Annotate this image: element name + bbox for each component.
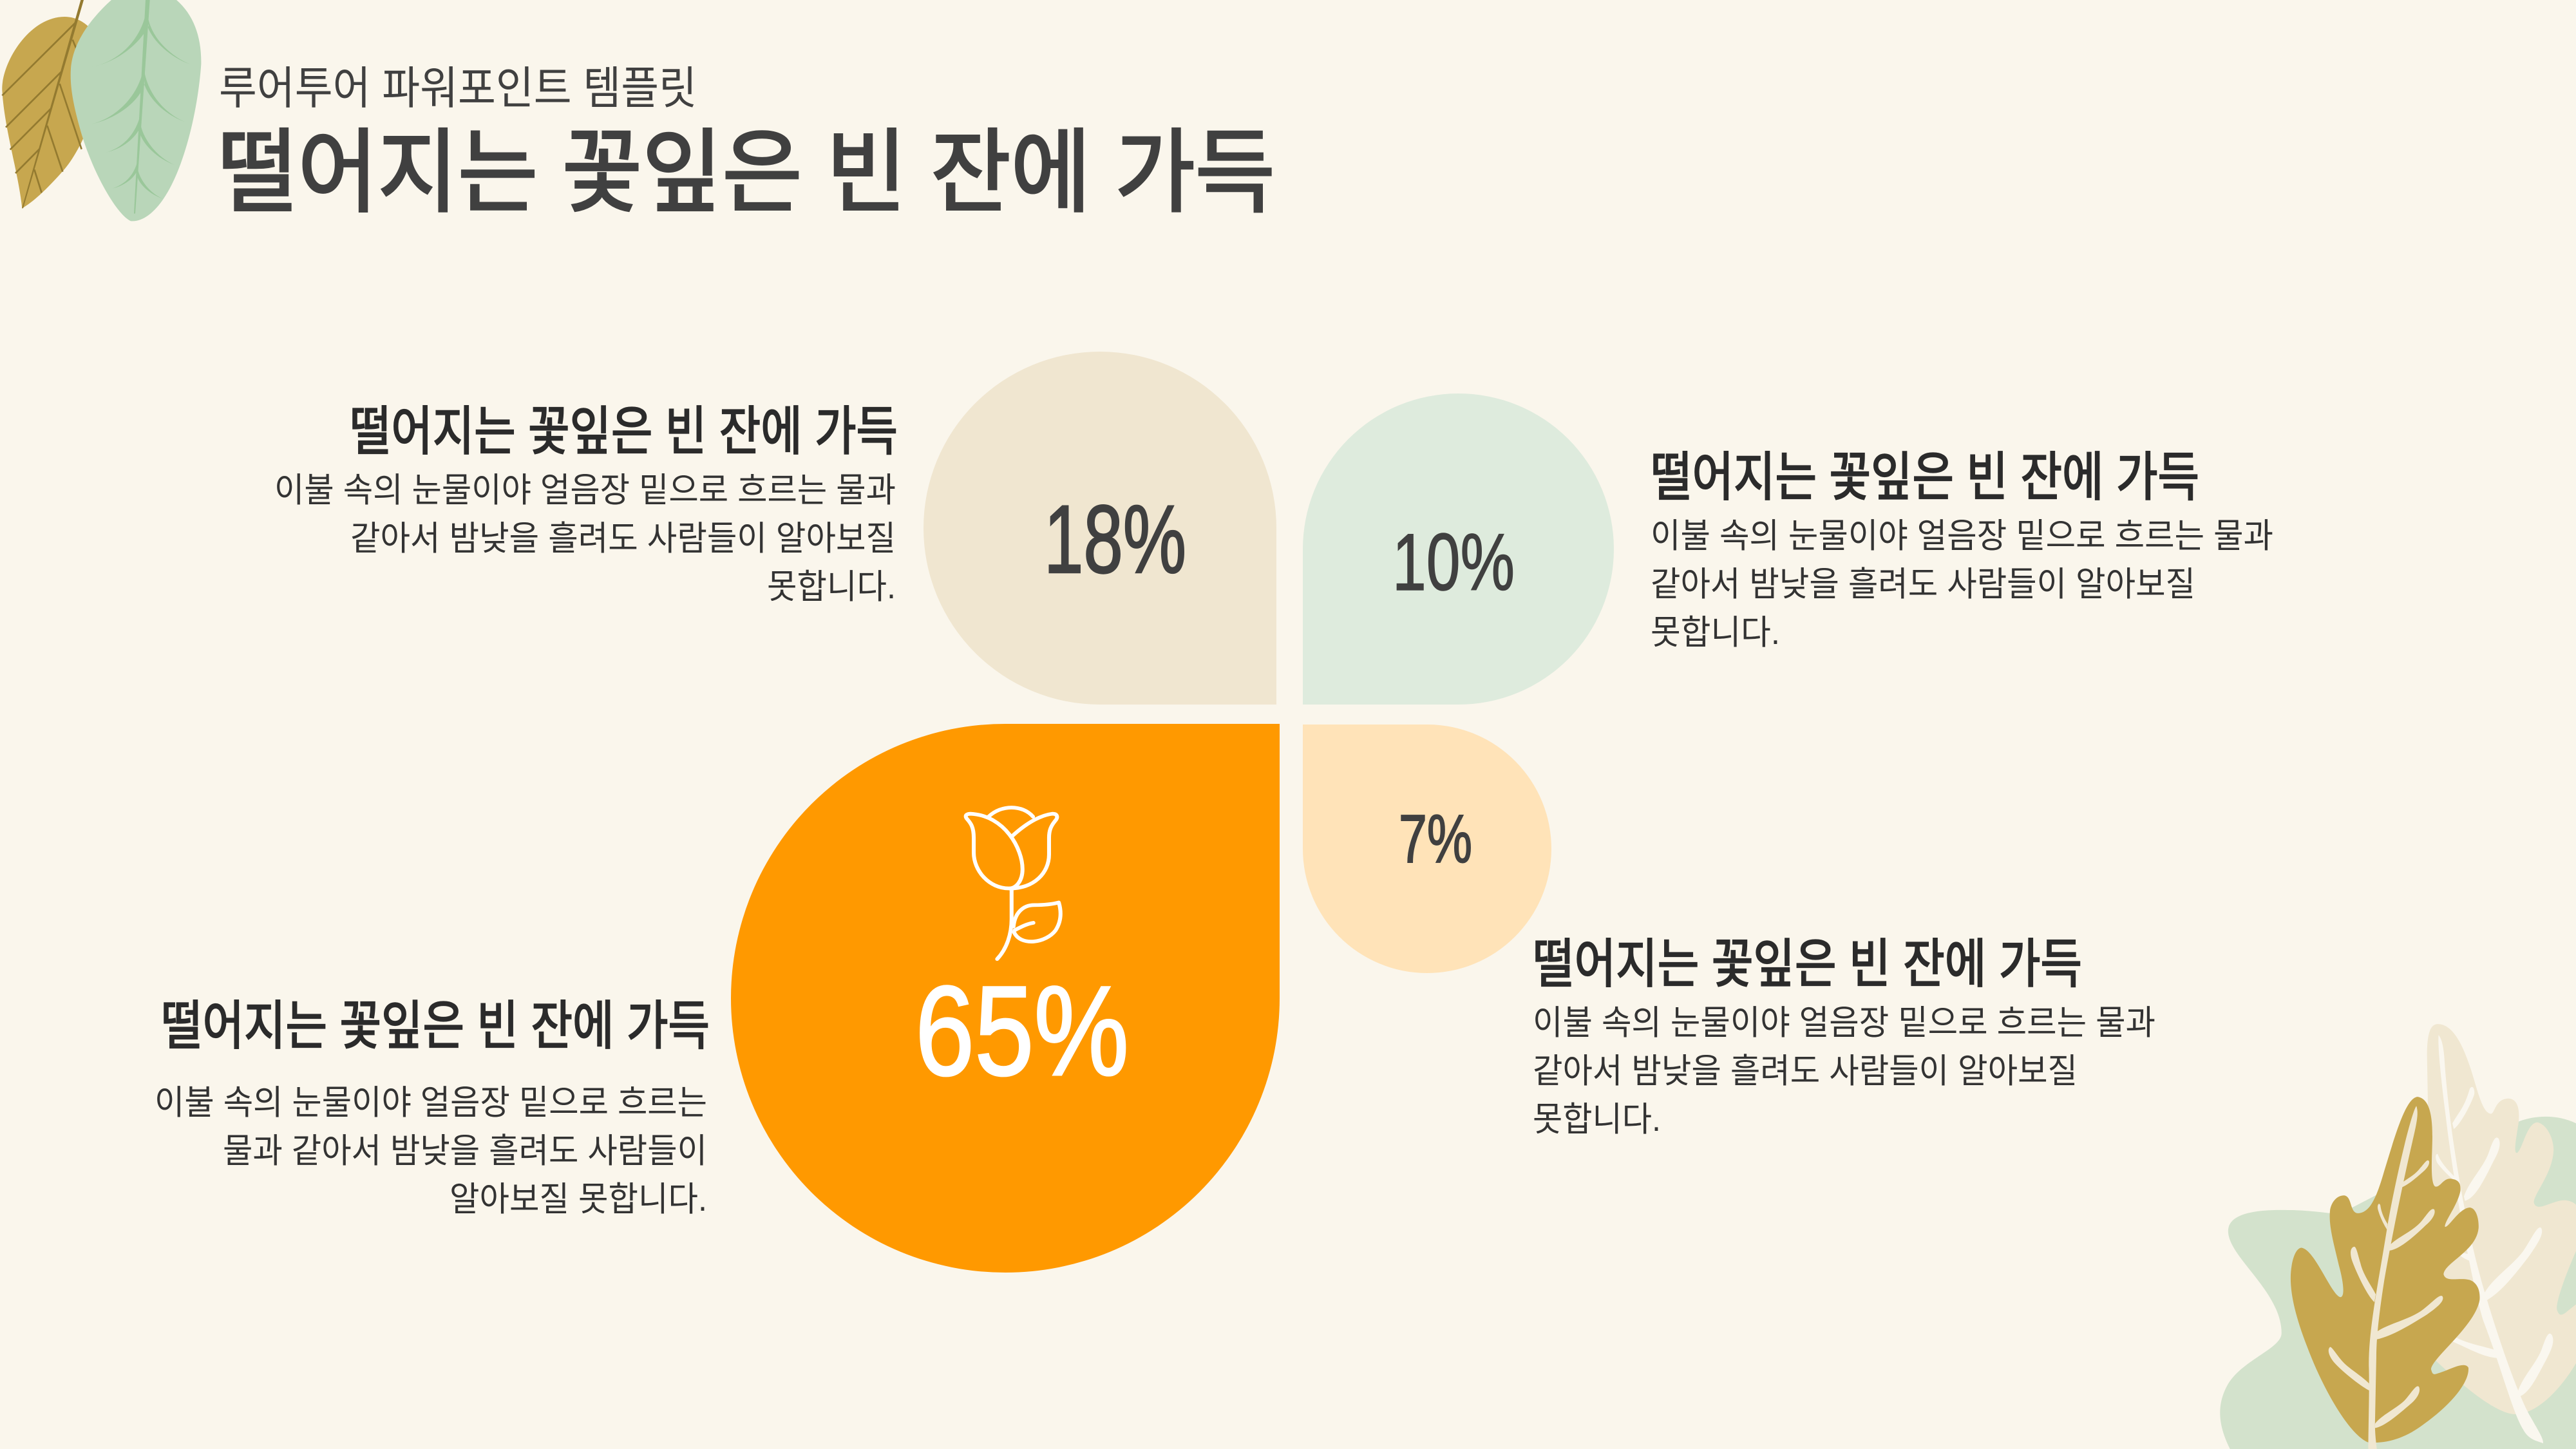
panel: 7% petal [1303, 724, 1551, 973]
body: 못합니다. [1533, 1101, 1661, 1139]
icon: cream leaf [2427, 1024, 2576, 1443]
icon: gold leaf [2291, 1097, 2480, 1449]
icon: green leaf [71, 0, 201, 221]
main title: 떨어지는 꽃잎은 빈 잔에 가득 [218, 122, 1275, 224]
body: 못합니다. [1651, 614, 1780, 652]
body [1651, 517, 2273, 652]
heading: 떨어지는 꽃잎은 빈 잔에 가득 [1533, 935, 2082, 994]
body: 알아보질 못합니다. [450, 1180, 707, 1218]
text block: 10% [1651, 448, 2273, 652]
body: 물과 같아서 밤낮을 흘려도 사람들이 [223, 1132, 707, 1170]
body: 같아서 밤낮을 흘려도 사람들이 알아보질 [1533, 1052, 2078, 1090]
body: 같아서 밤낮을 흘려도 사람들이 알아보질 [350, 520, 896, 558]
text block: 18% [274, 402, 898, 606]
body [274, 471, 896, 606]
icon: bottom-right leaves [2220, 1024, 2576, 1449]
text block: 7% [1533, 935, 2155, 1139]
icon: rose [966, 808, 1061, 959]
body: 이불 속의 눈물이야 얼음장 밑으로 흐르는 물과 [1533, 1004, 2155, 1042]
body: 이불 속의 눈물이야 얼음장 밑으로 흐르는 물과 [1651, 517, 2273, 555]
body [1533, 1004, 2155, 1139]
body [155, 1084, 707, 1218]
heading: 떨어지는 꽃잎은 빈 잔에 가득 [1651, 448, 2199, 507]
heading: 떨어지는 꽃잎은 빈 잔에 가득 [350, 402, 898, 461]
background blob [2220, 1117, 2576, 1449]
value: 65%: 65% [915, 960, 1129, 1102]
icon: top-left leaves [2, 0, 201, 221]
heading: 떨어지는 꽃잎은 빈 잔에 가득 [161, 997, 710, 1056]
value: 18%: 18% [1044, 485, 1186, 593]
text block: 65% [155, 997, 710, 1218]
body: 이불 속의 눈물이야 얼음장 밑으로 흐르는 [155, 1084, 707, 1122]
panel: 18% petal [923, 352, 1276, 705]
icon: gold leaf [2, 0, 102, 208]
title block [218, 63, 1275, 224]
value: 10%: 10% [1392, 518, 1515, 607]
panel: 10% petal [1303, 393, 1614, 705]
panel: 65% petal [731, 724, 1280, 1273]
body: 같아서 밤낮을 흘려도 사람들이 알아보질 [1651, 565, 2195, 603]
subtitle: 루어투어 파워포인트 템플릿 [219, 63, 697, 113]
body: 이불 속의 눈물이야 얼음장 밑으로 흐르는 물과 [274, 471, 896, 509]
value: 7%: 7% [1399, 801, 1472, 877]
body: 못합니다. [767, 568, 896, 606]
